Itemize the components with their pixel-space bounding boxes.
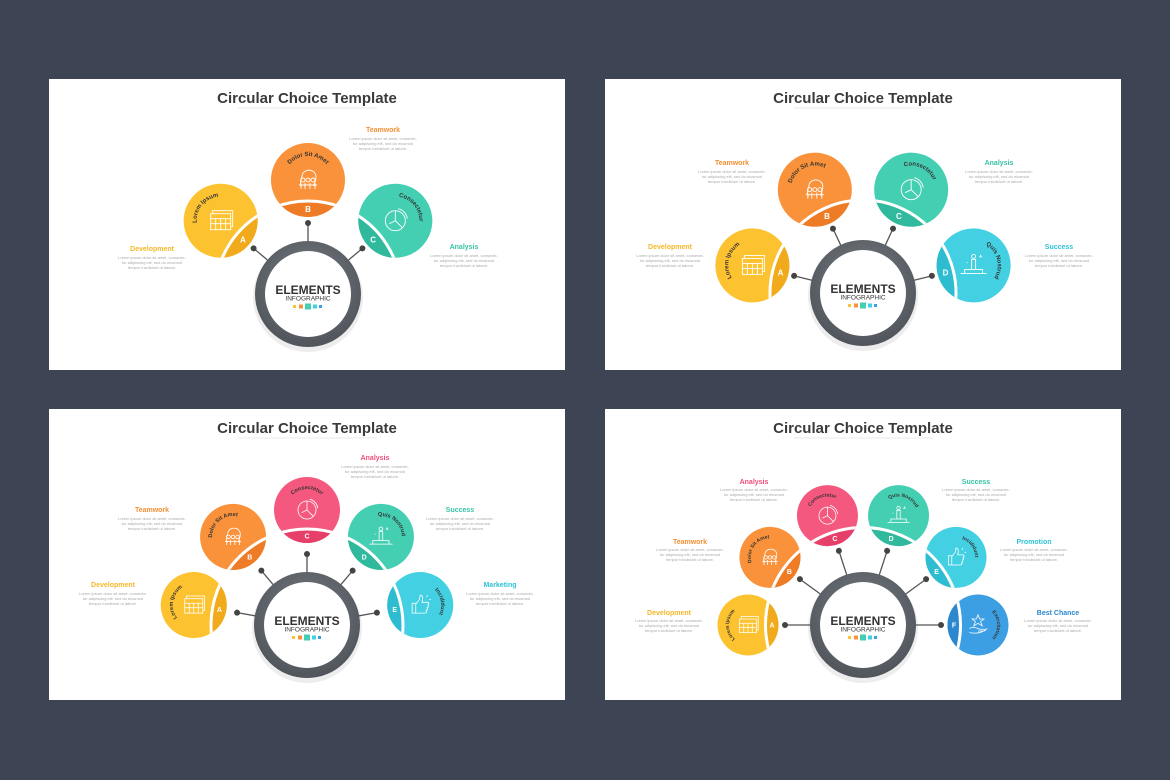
- text: Analysis: [965, 160, 1034, 184]
- text: Analysis: tempor incididunt ut labore.: [730, 497, 778, 502]
- option B: B: [305, 205, 311, 214]
- option C: [796, 485, 858, 575]
- hub 3: [252, 572, 362, 683]
- text: Analysis: Analysis: [361, 455, 390, 462]
- hub 1: [253, 241, 363, 352]
- text: Development: Lorem ipsum dolor sit amet, consecte-: [635, 618, 704, 623]
- option B: Dolor Sit Amet: [208, 512, 238, 538]
- option D: Quis Nostrud: [888, 493, 919, 508]
- text: Analysis: Lorem ipsum dolor sit amet, consecte-: [341, 464, 410, 469]
- option D: Quis Nostrud: [986, 242, 1002, 280]
- text: Development: tempor incididunt ut labore.: [646, 263, 694, 268]
- text: Success: Success: [1045, 244, 1073, 251]
- title 4: Circular Choice Template: [773, 420, 953, 437]
- text: Analysis: tempor incididunt ut labore.: [440, 263, 488, 268]
- text: Teamwork: Lorem ipsum dolor sit amet, consecte-: [349, 136, 418, 141]
- hub 3: ELEMENTS: [274, 614, 340, 628]
- text: Development: [635, 610, 704, 633]
- text: Analysis: Lorem ipsum dolor sit amet, consecte-: [430, 253, 499, 258]
- hub 1: ELEMENTS: [275, 283, 341, 297]
- text: Best Chance: tempor incididunt ut labore.: [1034, 628, 1082, 633]
- text: Success: Success: [962, 479, 990, 486]
- option D: D: [943, 268, 949, 277]
- text: Success: [1025, 244, 1094, 268]
- text: Teamwork: tempor incididunt ut labore.: [666, 557, 714, 562]
- text: Marketing: tempor incididunt ut labore.: [476, 601, 524, 606]
- option C: C: [304, 534, 310, 540]
- text: Teamwork: Teamwork: [135, 507, 169, 514]
- option A: [715, 228, 812, 302]
- text: Development: Development: [647, 610, 692, 617]
- option A: [184, 184, 268, 260]
- option F: [916, 594, 1008, 656]
- text: Development: Lorem ipsum dolor sit amet, consecte-: [118, 255, 187, 260]
- option D: Quis Nostrud: [378, 512, 406, 536]
- panel 1: three options: [49, 79, 565, 370]
- option C: Consectetur: [904, 162, 936, 180]
- option A: [718, 594, 810, 656]
- option B: [271, 143, 345, 241]
- option B: [778, 152, 852, 246]
- option B: [200, 504, 274, 585]
- option C: [874, 152, 948, 246]
- hub 2: ELEMENTS: [830, 282, 896, 296]
- option B: [739, 526, 820, 594]
- text: Marketing: Marketing: [483, 582, 517, 589]
- text: Success: tempor incididunt ut labore.: [1035, 263, 1083, 268]
- text: Teamwork: [656, 539, 725, 562]
- option A: A: [240, 235, 246, 244]
- text: Success: Lorem ipsum dolor sit amet, consecte-: [942, 487, 1011, 492]
- text: Analysis: [720, 479, 789, 502]
- option B: Dolor Sit Amet: [287, 152, 329, 164]
- text: Teamwork: tur adipiscing elit, sed do eiusmod: [702, 174, 762, 179]
- text: Development: Development: [648, 244, 693, 251]
- text: Development: tur adipiscing elit, sed do eiusmod: [640, 258, 700, 263]
- text: Success: tur adipiscing elit, sed do eiusmod: [430, 521, 490, 526]
- option D: [868, 485, 930, 575]
- hub 1: INFOGRAPHIC: [285, 296, 331, 302]
- text: Analysis: tempor incididunt ut labore.: [351, 474, 399, 479]
- option D: D: [889, 536, 894, 543]
- text: Success: tur adipiscing elit, sed do eiusmod: [946, 492, 1006, 497]
- text: Analysis: Lorem ipsum dolor sit amet, consecte-: [720, 487, 789, 492]
- text: Success: tempor incididunt ut labore.: [436, 526, 484, 531]
- text: Analysis: tur adipiscing elit, sed do eiusmod: [969, 174, 1029, 179]
- option C: Consectetur: [290, 486, 324, 494]
- text: Development: [636, 244, 705, 268]
- text: Analysis: Lorem ipsum dolor sit amet, consecte-: [965, 169, 1034, 174]
- text: Analysis: tur adipiscing elit, sed do eiusmod: [724, 492, 784, 497]
- hub 2: INFOGRAPHIC: [840, 294, 886, 302]
- hub 4: [808, 572, 918, 683]
- option C: [348, 184, 432, 260]
- text: Promotion: tur adipiscing elit, sed do eiusmod: [1004, 552, 1064, 557]
- text: Marketing: [466, 582, 535, 606]
- hub 3: INFOGRAPHIC: [284, 626, 330, 634]
- option F: Exercitation: [992, 610, 1001, 640]
- text: Teamwork: [698, 160, 767, 184]
- text: Analysis: Analysis: [985, 160, 1014, 167]
- text: Teamwork: Lorem ipsum dolor sit amet, consecte-: [118, 516, 187, 521]
- text: Development: tempor incididunt ut labore.: [128, 265, 176, 270]
- text: Development: tempor incididunt ut labore.: [645, 628, 693, 633]
- text: Development: tur adipiscing elit, sed do eiusmod: [83, 596, 143, 601]
- panel 4: six options: [605, 409, 1121, 700]
- text: Analysis: Analysis: [740, 479, 769, 486]
- text: Promotion: [1000, 539, 1069, 562]
- panel 2: four options: [605, 79, 1121, 370]
- option D: [914, 228, 1011, 302]
- option B: Dolor Sit Amet: [747, 535, 770, 564]
- text: Teamwork: Teamwork: [366, 127, 400, 134]
- option A: Lorem Ipsum: [725, 242, 740, 280]
- text: Marketing: Lorem ipsum dolor sit amet, consecte-: [466, 591, 535, 596]
- text: Development: Development: [91, 582, 136, 589]
- text: Teamwork: tempor incididunt ut labore.: [708, 179, 756, 184]
- option A: A: [217, 607, 222, 614]
- text: Analysis: [341, 455, 410, 479]
- text: Success: Lorem ipsum dolor sit amet, consecte-: [426, 516, 495, 521]
- option D: [340, 504, 414, 585]
- text: Teamwork: tur adipiscing elit, sed do eiusmod: [353, 141, 413, 146]
- text: Development: Lorem ipsum dolor sit amet, consecte-: [79, 591, 148, 596]
- text: Development: tur adipiscing elit, sed do eiusmod: [639, 623, 699, 628]
- text: Teamwork: tempor incididunt ut labore.: [128, 526, 176, 531]
- text: Best Chance: [1024, 610, 1093, 633]
- text: Development: [118, 246, 187, 270]
- option A: Lorem Ipsum: [170, 586, 182, 620]
- text: Success: tur adipiscing elit, sed do eiusmod: [1029, 258, 1089, 263]
- option E: [906, 526, 986, 594]
- text: Teamwork: Lorem ipsum dolor sit amet, consecte-: [656, 547, 725, 552]
- option C: C: [896, 212, 902, 221]
- option A: [160, 572, 255, 638]
- text: Analysis: [430, 244, 499, 268]
- option B: B: [247, 554, 252, 561]
- text: Promotion: Lorem ipsum dolor sit amet, consecte-: [1000, 547, 1069, 552]
- text: Teamwork: [118, 507, 187, 531]
- text: Teamwork: tempor incididunt ut labore.: [359, 146, 407, 151]
- option C: Consectetur: [808, 493, 837, 506]
- text: Teamwork: tur adipiscing elit, sed do eiusmod: [660, 552, 720, 557]
- text: Success: Success: [446, 507, 474, 514]
- text: Best Chance: Best Chance: [1037, 610, 1079, 617]
- text: Success: [942, 479, 1011, 502]
- option F: F: [952, 622, 957, 630]
- text: Promotion: Promotion: [1016, 539, 1052, 546]
- text: Teamwork: [349, 127, 418, 151]
- panel 3: five options: [49, 409, 565, 700]
- title 3: Circular Choice Template: [217, 420, 397, 437]
- text: Success: [426, 507, 495, 531]
- option A: A: [769, 622, 775, 630]
- text: Best Chance: tur adipiscing elit, sed do eiusmod: [1028, 623, 1088, 628]
- text: Development: Lorem ipsum dolor sit amet, consecte-: [636, 253, 705, 258]
- option C: Consectetur: [399, 193, 423, 222]
- text: Best Chance: Lorem ipsum dolor sit amet, consecte-: [1024, 618, 1093, 623]
- option E: Incididunt: [962, 536, 978, 558]
- text: Marketing: tur adipiscing elit, sed do eiusmod: [470, 596, 530, 601]
- text: Development: tempor incididunt ut labore.: [89, 601, 137, 606]
- text: Development: Development: [130, 246, 175, 253]
- option B: Dolor Sit Amet: [788, 162, 826, 183]
- hub 4: ELEMENTS: [830, 614, 896, 628]
- option C: [274, 477, 340, 572]
- option A: Lorem Ipsum: [726, 610, 735, 642]
- hub 2: [808, 240, 918, 351]
- option C: C: [832, 536, 837, 543]
- option E: Incididunt: [435, 588, 446, 616]
- text: Promotion: tempor incididunt ut labore.: [1010, 557, 1058, 562]
- option E: [359, 572, 454, 638]
- text: Analysis: Analysis: [450, 244, 479, 251]
- text: Analysis: tur adipiscing elit, sed do eiusmod: [434, 258, 494, 263]
- text: Teamwork: Lorem ipsum dolor sit amet, consecte-: [698, 169, 767, 174]
- option A: Lorem Ipsum: [192, 194, 218, 222]
- option E: E: [392, 607, 397, 614]
- text: Success: tempor incididunt ut labore.: [952, 497, 1000, 502]
- option E: E: [934, 569, 939, 576]
- text: Teamwork: tur adipiscing elit, sed do eiusmod: [122, 521, 182, 526]
- text: Teamwork: Teamwork: [673, 539, 707, 546]
- option B: B: [824, 212, 830, 221]
- title 2: Circular Choice Template: [773, 90, 953, 107]
- text: Analysis: tur adipiscing elit, sed do eiusmod: [345, 469, 405, 474]
- text: Teamwork: Teamwork: [715, 160, 749, 167]
- text: Success: Lorem ipsum dolor sit amet, consecte-: [1025, 253, 1094, 258]
- title 1: Circular Choice Template: [217, 90, 397, 107]
- option C: C: [370, 235, 376, 244]
- option A: A: [778, 268, 784, 277]
- text: Development: tur adipiscing elit, sed do eiusmod: [122, 260, 182, 265]
- option D: D: [362, 554, 367, 561]
- text: Analysis: tempor incididunt ut labore.: [975, 179, 1023, 184]
- option B: B: [787, 569, 792, 576]
- hub 4: INFOGRAPHIC: [840, 626, 886, 634]
- text: Development: [79, 582, 148, 606]
